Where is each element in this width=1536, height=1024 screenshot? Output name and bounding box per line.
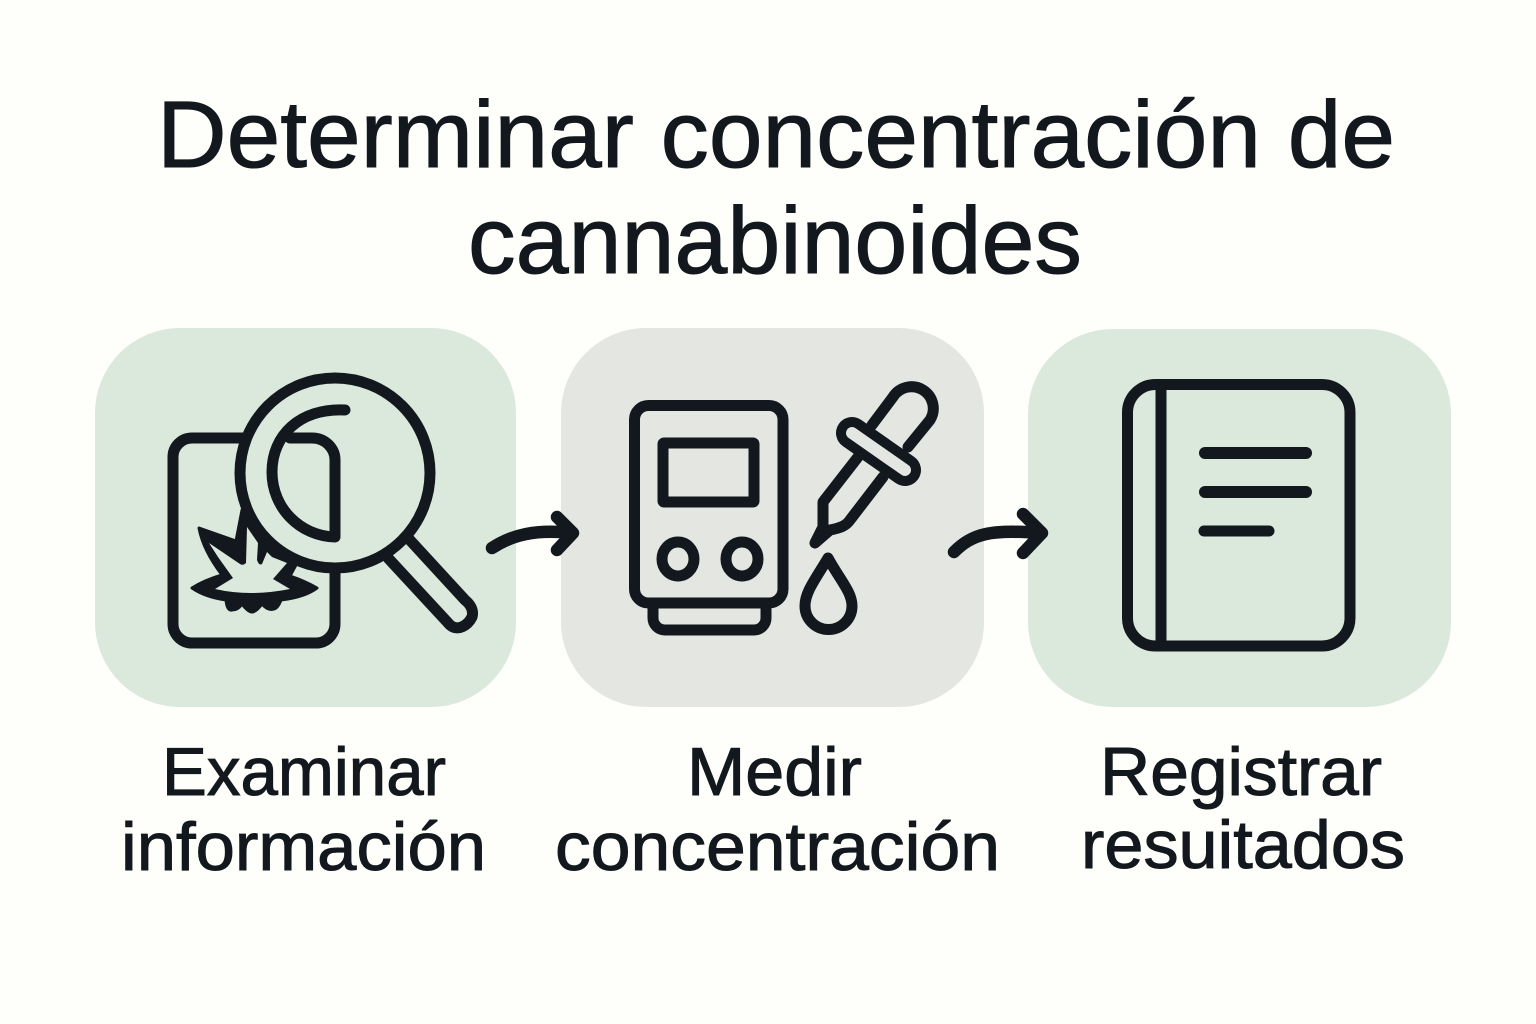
meter screen [663,443,754,502]
label: medir concentración: Medir [687,734,862,810]
magnifier handle [388,538,473,628]
icon: notebook [1128,384,1350,646]
notebook spine [1156,385,1166,646]
label: examinar información: información [121,809,486,885]
meter body [634,406,783,603]
icon: document with leaf under magnifying glass [173,378,473,643]
panel: registrar [1028,329,1451,707]
magnifier lens [240,378,430,568]
dropper collar [852,433,905,470]
panel: medir [561,328,984,707]
label: medir concentración: concentración [555,809,1000,885]
label: registrar resultados: Registrar [1100,734,1382,810]
panel: examinar [95,328,516,707]
meter knob right [726,542,758,576]
title: Determinar concentración de [157,82,1395,188]
drop [805,558,852,630]
lens inner reflection and document corner [272,410,345,537]
label: examinar información [121,734,486,885]
dropper tube [815,457,883,543]
label: medir concentración [555,734,1000,885]
title [157,82,1395,294]
cannabis leaf [192,510,317,612]
notebook cover [1128,384,1350,646]
arrow: examinar to medir [492,517,573,550]
label: registrar resultados: resuitados [1081,807,1405,883]
notebook text lines [1204,453,1306,531]
label: examinar información: Examinar [162,734,446,810]
dropper bulb [872,387,933,447]
arrow: medir to registrar [954,514,1042,553]
meter knob left [662,542,694,576]
icon: concentration meter and dropper [634,387,933,630]
document outline [173,438,335,643]
meter base [653,606,766,630]
label: registrar resultados [1081,734,1405,883]
title: cannabinoides [468,188,1082,294]
